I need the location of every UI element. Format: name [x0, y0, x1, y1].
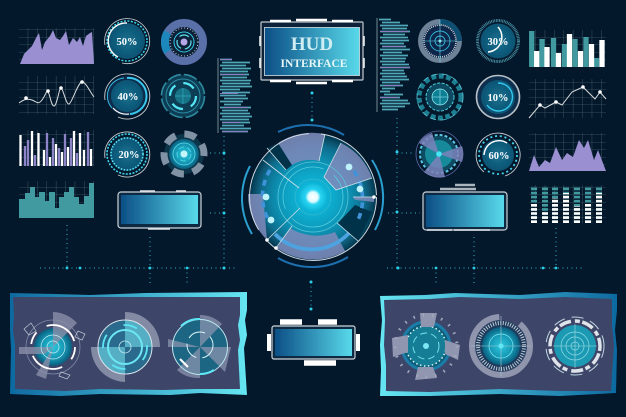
- chart: white and purple bars left: [19, 130, 94, 166]
- chart: teal step area left: [19, 181, 94, 218]
- gauge 60%: 60%: [488, 151, 510, 162]
- left panel dial 1: [19, 312, 85, 379]
- title panel: [260, 20, 364, 83]
- title text: HUD: [291, 34, 333, 55]
- gauge 10%: 10%: [488, 93, 508, 104]
- radial dial left 2: [162, 74, 204, 118]
- screen frame right: [423, 185, 507, 230]
- outer arcs: [242, 125, 383, 267]
- gauge 50%: [105, 19, 150, 64]
- chart: line left: [19, 76, 94, 114]
- gauge 40%: [105, 74, 150, 119]
- chart: purple area left: [19, 28, 94, 64]
- data text list right: [377, 18, 410, 112]
- gauge 30%: [478, 20, 518, 62]
- gauge 60%: [476, 133, 520, 176]
- radial dial left 3: [157, 127, 211, 181]
- right dial 1: [418, 19, 462, 63]
- right dial 3: [416, 131, 463, 178]
- right panel dial 3: [546, 317, 604, 375]
- left panel dial 3: [168, 315, 231, 378]
- screen frame left: [118, 191, 201, 229]
- right bottom panel: [380, 292, 617, 396]
- right dial 2: [417, 74, 463, 120]
- radial dial left 1: [158, 16, 210, 68]
- dark wedges: [267, 143, 372, 241]
- connector dotted lines: [40, 93, 583, 309]
- screen frame bottom: [269, 322, 358, 363]
- data text list left: [218, 58, 252, 133]
- chart: line right: [529, 79, 606, 118]
- blue ring band: [275, 233, 349, 249]
- chart: purple area right: [529, 133, 606, 171]
- gauge 20%: 20%: [118, 150, 140, 161]
- subtitle text: INTERFACE: [281, 58, 348, 70]
- right panel dial 2: [460, 305, 542, 387]
- gauge 10%: [476, 76, 520, 118]
- gauge 40%: 40%: [118, 92, 138, 103]
- main radar dial: [242, 125, 383, 267]
- chart: teal and white bars right: [529, 30, 606, 67]
- gauge 30%: 30%: [488, 37, 508, 48]
- left bottom panel: [10, 292, 247, 396]
- dial sectors: [248, 133, 374, 260]
- gauge 20%: [105, 132, 150, 177]
- dial centre glow: [299, 183, 327, 211]
- gauge 50%: 50%: [116, 37, 138, 48]
- left panel dial 2: [91, 312, 160, 382]
- chart: segmented bars right: [529, 185, 606, 223]
- right panel dial 1: [392, 313, 460, 380]
